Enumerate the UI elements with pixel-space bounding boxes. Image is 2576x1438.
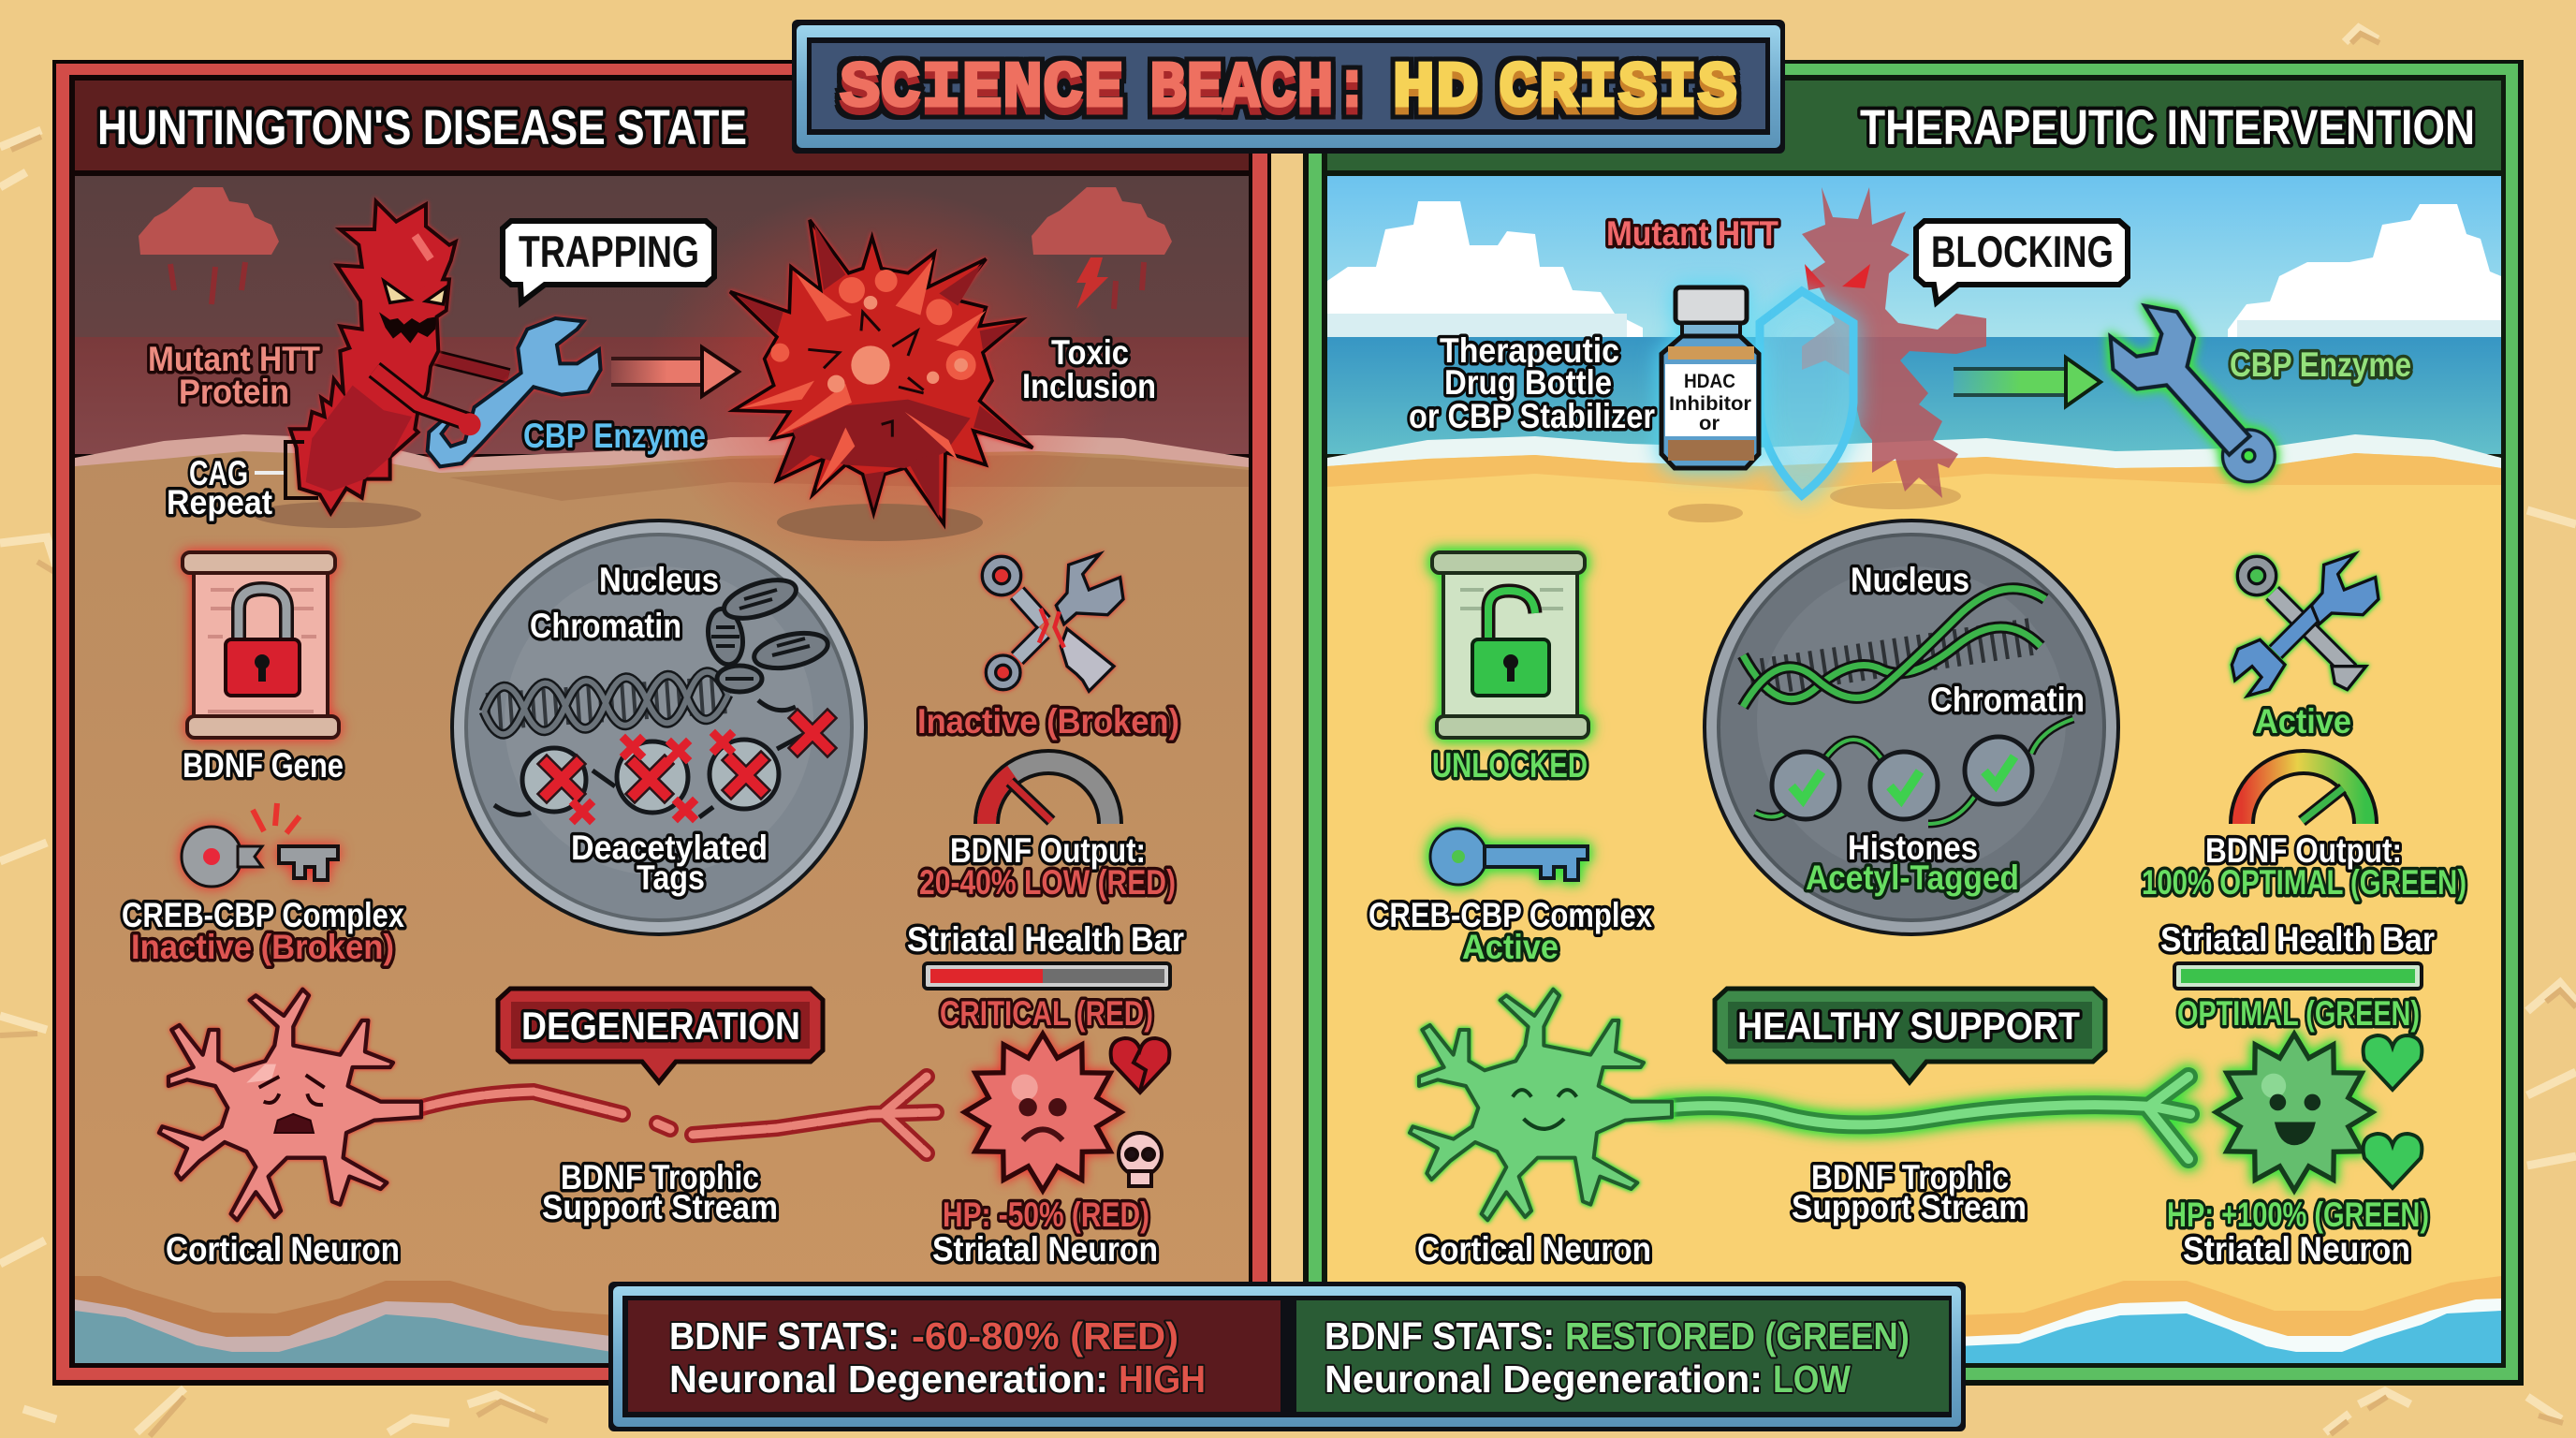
speech bubble: trapping: TRAPPING [519, 227, 699, 276]
shield [1760, 291, 1853, 495]
label: UNLOCKED: UNLOCKED [1432, 746, 1588, 785]
panel header band [1327, 81, 2501, 170]
nucleus labels: Chromatin [1930, 681, 2085, 719]
label: Mutant HTT Protein: Protein [179, 373, 289, 411]
stats: disease: BDNF STATS: [669, 1314, 900, 1357]
label: BDNF output optimal [2142, 831, 2466, 902]
panel heading: THERAPEUTIC INTERVENTION [1860, 100, 2475, 155]
icon: active key [1430, 829, 1588, 885]
label: active: Active [2255, 702, 2351, 741]
label: cortical neuron: Cortical Neuron [166, 1230, 400, 1269]
bottom shore right [1956, 1276, 2501, 1363]
label: BDNF trophic stream [1792, 1158, 2027, 1226]
label: therapeutic drug bottle: Therapeutic [1440, 331, 1619, 370]
bottom shore left [75, 1276, 618, 1363]
label: BDNF output optimal: BDNF Output: [2205, 831, 2402, 870]
gauge: BDNF output optimal [2242, 762, 2365, 824]
stats: disease [628, 1300, 1281, 1412]
label: Toxic Inclusion: Inclusion [1022, 367, 1156, 405]
speech bubble: blocking [1916, 221, 2128, 302]
stats: disease: HIGH [1119, 1357, 1206, 1401]
title text: BEACH: [1149, 52, 1370, 126]
label: Toxic Inclusion: Toxic [1051, 333, 1129, 372]
label: HP -50%: HP: -50% (RED) [943, 1196, 1149, 1234]
monster eyes [1805, 264, 1870, 290]
label: BDNF trophic stream: Support Stream [1792, 1188, 2027, 1226]
nucleus labels: Histones [1848, 829, 1978, 867]
label: BDNF output low: 20-40% LOW (RED) [919, 863, 1176, 902]
bottle label [1669, 371, 1751, 434]
nucleus labels: Acetyl-Tagged [1806, 858, 2019, 897]
label: HP +100%: HP: +100% (GREEN) [2167, 1196, 2429, 1234]
stats: therapy: LOW [1773, 1357, 1851, 1401]
title text [840, 52, 1737, 126]
label: CREB-CBP Complex inactive: CREB-CBP Complex [122, 896, 404, 934]
stats: therapy: BDNF STATS: [1325, 1314, 1555, 1357]
storm cloud right [1032, 187, 1172, 309]
freed CBP enzyme wrench [2096, 292, 2291, 496]
panel heading: HUNTINGTON'S DISEASE STATE [97, 100, 747, 155]
label: striatal neuron: Striatal Neuron [932, 1230, 1158, 1269]
nucleus labels: Nucleus [599, 561, 719, 599]
label: CREB-CBP Complex active: Active [1462, 928, 1559, 966]
label: BDNF output optimal: 100% OPTIMAL (GREEN) [2142, 863, 2466, 902]
label: therapeutic drug bottle [1409, 331, 1655, 435]
front arm and hand [374, 370, 471, 423]
broken BDNF axon stream [412, 1077, 936, 1153]
icon: skull [1119, 1133, 1162, 1186]
label: Mutant HTT: Mutant HTT [1606, 214, 1778, 253]
monster body [290, 201, 456, 513]
arrow to toxic inclusion [611, 347, 739, 396]
back arm [433, 358, 508, 376]
cortical neuron (happy) [1410, 990, 1672, 1220]
nucleus: chromatin with deacetylated tags [450, 519, 868, 936]
striatal health bar critical [907, 920, 1184, 989]
label: BDNF trophic stream [542, 1158, 778, 1226]
striatal health bar optimal [2160, 920, 2435, 989]
stats: therapy: RESTORED (GREEN) [1565, 1314, 1910, 1357]
title plaque [792, 20, 1785, 154]
striatal neuron (happy) [2216, 1034, 2373, 1191]
panel: therapeutic intervention [1303, 60, 2524, 1386]
label: therapeutic drug bottle: Drug Bottle [1444, 363, 1612, 402]
label: critical: CRITICAL (RED) [940, 994, 1153, 1033]
panel: Huntington's disease state [52, 60, 1271, 1386]
stats: disease: Neuronal Degeneration: [669, 1357, 1108, 1401]
label: CBP Enzyme: CBP Enzyme [2230, 345, 2411, 384]
label: Mutant HTT Protein [148, 340, 320, 411]
histones [522, 740, 779, 813]
label: CREB-CBP Complex inactive [122, 896, 404, 966]
deacetylated red X tags [547, 718, 827, 819]
callout: healthy support [1715, 989, 2105, 1082]
label: CREB-CBP Complex active: CREB-CBP Complex [1368, 896, 1652, 934]
icon: locked BDNF gene scroll [183, 552, 339, 738]
gauge: BDNF output low [987, 762, 1110, 824]
striatal health bar optimal: Striatal Health Bar [2160, 920, 2435, 959]
cortical neuron (sad) [159, 990, 421, 1220]
nucleus labels: Tags [637, 858, 705, 897]
panel header band [75, 81, 1249, 170]
stats: therapy: Neuronal Degeneration: [1325, 1357, 1763, 1401]
speech bubble: blocking: BLOCKING [1931, 227, 2114, 276]
stats: disease: -60-80% (RED) [912, 1314, 1178, 1357]
condensed DNA helix [484, 672, 728, 734]
nucleus labels: Deacetylated [571, 829, 768, 867]
callout: degeneration: DEGENERATION [521, 1004, 800, 1048]
striatal neuron (sad) [964, 1034, 1121, 1191]
label: optimal: OPTIMAL (GREEN) [2177, 994, 2420, 1033]
label: inactive broken: Inactive (Broken) [917, 702, 1179, 741]
label: BDNF trophic stream: BDNF Trophic [1811, 1158, 2009, 1196]
green DNA helix [1743, 589, 2045, 707]
monster mouth [379, 312, 436, 344]
icon: broken crossed tools [982, 554, 1123, 691]
nucleus labels [530, 561, 768, 897]
icon: unlocked gene scroll [1432, 552, 1588, 738]
label: CREB-CBP Complex active [1368, 896, 1652, 966]
scene: sunny beach [1327, 176, 2501, 1363]
label: CAG repeat with bracket: Repeat [167, 483, 272, 521]
title text: HD [1392, 52, 1479, 126]
bottle label: HDAC [1684, 371, 1735, 392]
label: BDNF Gene: BDNF Gene [183, 746, 344, 785]
mutant HTT protein monster [290, 201, 601, 513]
icon: broken heart [1111, 1038, 1169, 1093]
tangled DNA coil [494, 572, 831, 817]
label: CREB-CBP Complex inactive: Inactive (Broken) [131, 928, 394, 966]
histones with check marks [1755, 719, 2073, 824]
nucleus labels: Chromatin [530, 607, 681, 645]
stats plaque [608, 1282, 1966, 1431]
label: cortical neuron: Cortical Neuron [1417, 1230, 1651, 1269]
toxic inclusion spiky aggregate [730, 220, 1032, 524]
callout: degeneration [498, 989, 823, 1082]
bottle label: Inhibitor [1669, 393, 1751, 415]
striatal health bar critical: Striatal Health Bar [907, 920, 1184, 959]
icon: broken CREB-CBP key [182, 803, 338, 887]
monster eyes [384, 281, 446, 304]
ghosted mutant HTT monster [1802, 187, 1986, 498]
drug bottle [1661, 287, 1759, 468]
title text: CRISIS [1499, 52, 1737, 126]
callout: healthy support: HEALTHY SUPPORT [1737, 1004, 2080, 1048]
label: CAG repeat with bracket: CAG [189, 454, 248, 492]
label: BDNF trophic stream: BDNF Trophic [561, 1158, 759, 1196]
healthy BDNF axon stream [1661, 1077, 2190, 1159]
label: striatal neuron: Striatal Neuron [2183, 1230, 2410, 1269]
arrow to freed enzyme [1954, 358, 2100, 406]
CBP enzyme wrench trapped [428, 318, 601, 466]
speech bubble: trapping [503, 221, 714, 302]
stats: therapy [1296, 1300, 1949, 1412]
icon: active crossed tools [2232, 554, 2378, 696]
label: CBP Enzyme: CBP Enzyme [523, 417, 706, 455]
label: therapeutic drug bottle: or CBP Stabilizer [1409, 397, 1655, 435]
icon: hearts [2364, 1035, 2422, 1188]
nucleus labels [1806, 561, 2085, 897]
label: BDNF trophic stream: Support Stream [542, 1188, 778, 1226]
nucleus: open chromatin with acetyl tags [1703, 519, 2120, 936]
scene: dark stormy beach [75, 176, 1249, 1363]
label: Toxic Inclusion [1022, 333, 1156, 405]
bottle label: or [1699, 413, 1720, 434]
title text: SCIENCE [840, 52, 1124, 126]
label: BDNF output low: BDNF Output: [950, 831, 1146, 870]
label: Mutant HTT Protein: Mutant HTT [148, 340, 320, 378]
clouds [1327, 201, 2501, 339]
nucleus labels: Nucleus [1851, 561, 1969, 599]
label: BDNF output low [919, 831, 1176, 902]
label: CAG repeat with bracket [167, 442, 318, 521]
storm cloud left [139, 187, 279, 304]
